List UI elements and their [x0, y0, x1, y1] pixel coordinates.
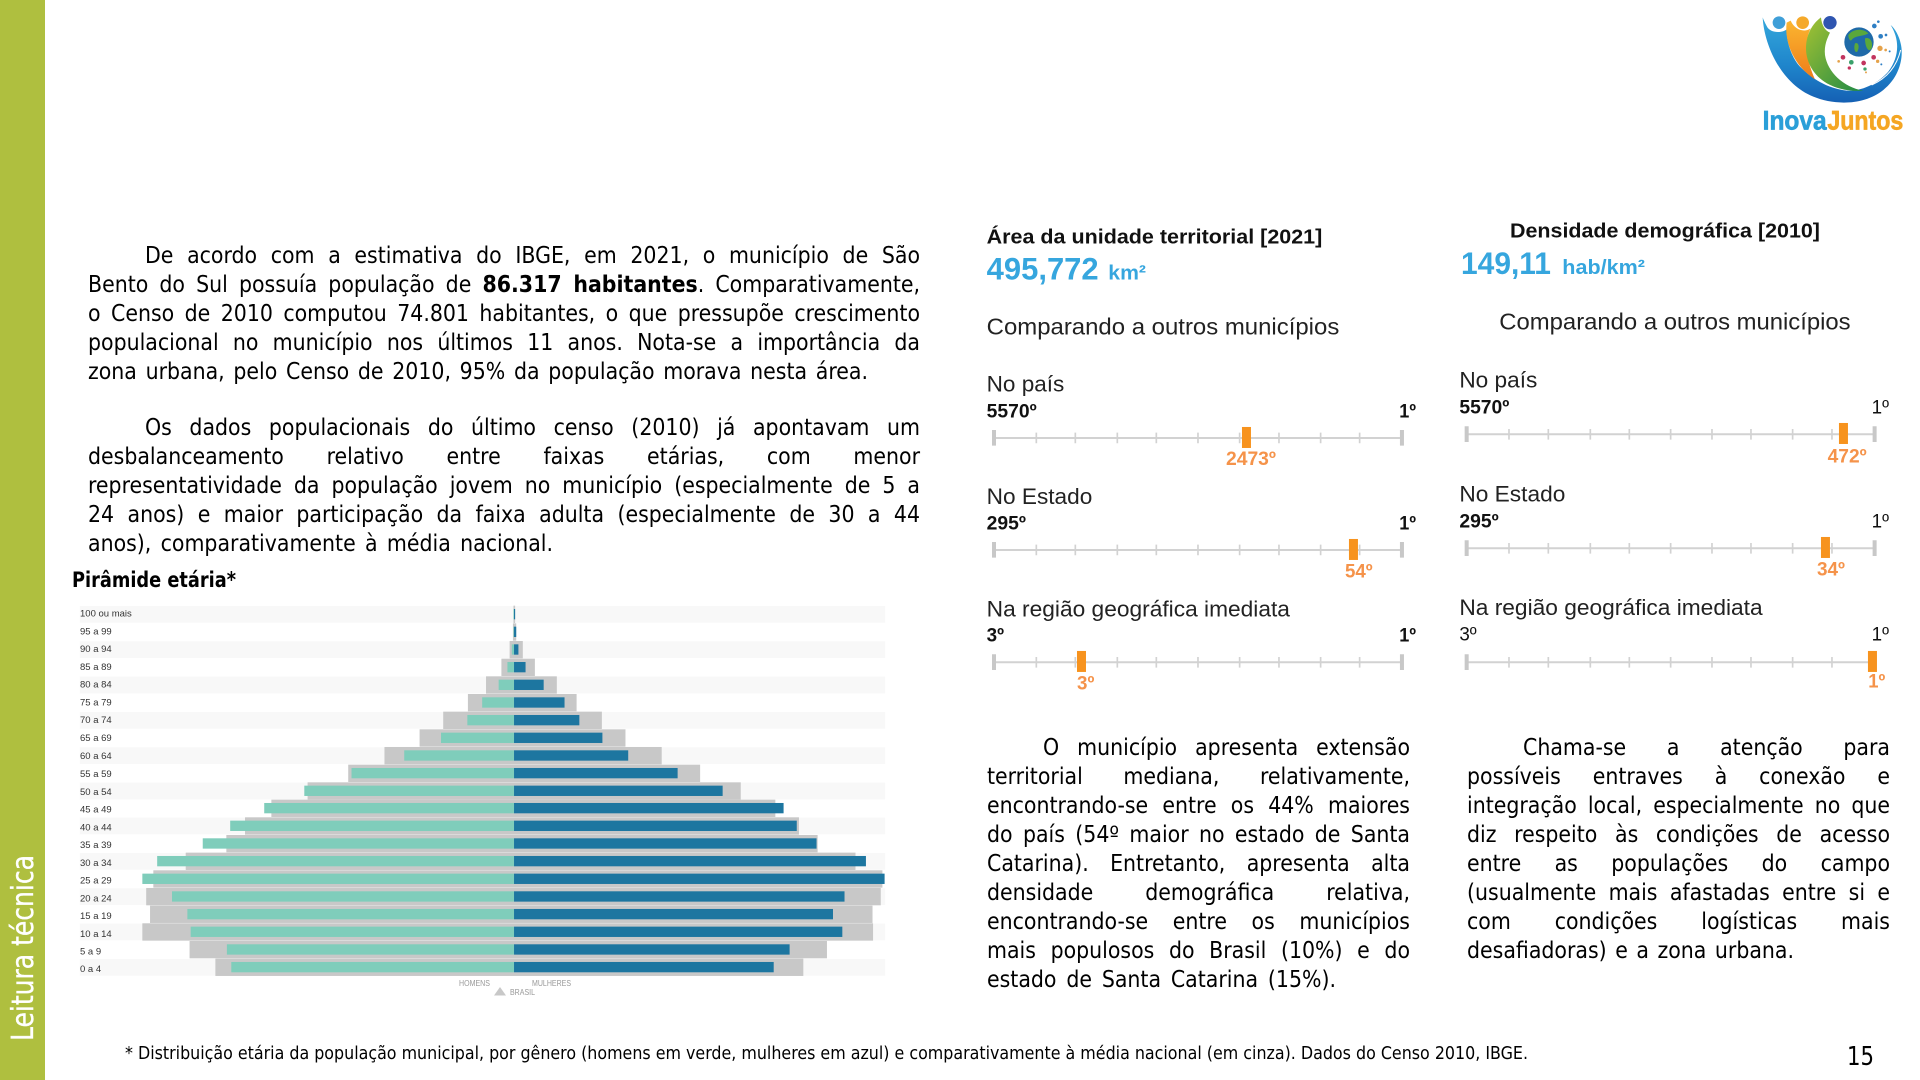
scale: no país: No país	[987, 372, 1064, 397]
text block: area commentary: estado de Santa Catarina (15%).	[987, 967, 1336, 993]
scale: no estado: 295º	[987, 513, 1026, 534]
text block: paragraph 2: 24 anos) e maior participação da faixa adulta (especialmente de 30 a 44	[88, 502, 920, 528]
text block: area commentary: O município apresenta extensão	[1043, 735, 1410, 761]
logo: InovaJuntos: Juntos	[1827, 105, 1903, 135]
heading: Pirâmide etária: Pirâmide etária*	[72, 568, 236, 592]
row bands	[80, 606, 885, 976]
density title and value	[1461, 220, 1851, 334]
legend: MULHERES	[532, 979, 571, 988]
scale: no estado: 34º	[1817, 560, 1845, 581]
area title and value: km²	[1108, 262, 1146, 284]
scale: no estado: 54º	[1345, 561, 1373, 582]
age labels: 25 a 29	[80, 876, 112, 886]
text block: paragraph 1: o Censo de 2010 computou 74.801 habitantes, o que pressupõe crescimento	[88, 300, 920, 326]
scale: no país	[987, 372, 1416, 470]
scale: região geográfica imediata: 3º	[987, 626, 1004, 647]
text block: paragraph 1	[88, 242, 920, 384]
text block: paragraph 2: representatividade da população jovem no município (especialmente de 5 a	[88, 473, 920, 499]
area title and value	[987, 225, 1339, 339]
text block: paragraph 2: desbalanceamento relativo entre faixas etárias, com menor	[88, 444, 920, 470]
text block: paragraph 1: populacional no município nos últimos 11 anos. Nota-se a importância da	[88, 330, 920, 356]
scale: no país: No país	[1459, 368, 1537, 393]
text block: density commentary	[1467, 735, 1890, 964]
age labels: 20 a 24	[80, 894, 112, 904]
age labels: 70 a 74	[80, 715, 112, 726]
age labels: 0 a 4	[80, 964, 101, 975]
page number: 15	[1847, 1042, 1874, 1072]
male bars	[142, 609, 514, 972]
text block: density commentary: entre as populações do campo	[1467, 851, 1890, 877]
age labels: 10 a 14	[80, 929, 112, 940]
age labels: 95 a 99	[80, 626, 112, 638]
sidebar: Leitura técnica	[0, 0, 45, 1080]
scale: região geográfica imediata: 1º	[1399, 626, 1416, 647]
area title and value: Comparando a outros municípios	[987, 313, 1339, 339]
text block: density commentary: diz respeito às condições de acesso	[1467, 822, 1890, 848]
age labels	[80, 608, 132, 975]
text block: density commentary: com condições logísticas mais	[1467, 909, 1890, 935]
text block: area commentary: Catarina). Entretanto, apresenta alta	[987, 851, 1410, 877]
text block: area commentary	[987, 735, 1410, 993]
scale: região geográfica imediata: Na região geográfica imediata	[987, 597, 1291, 622]
area title and value: 495,772	[987, 250, 1099, 286]
text block: density commentary: Chama-se a atenção para	[1523, 735, 1890, 761]
text block: density commentary: integração local, especialmente no que	[1467, 793, 1890, 819]
scale: no país: 1º	[1872, 397, 1889, 418]
text block: density commentary: desafiadoras) e a zona urbana.	[1467, 938, 1794, 964]
scale: região geográfica imediata	[1459, 595, 1889, 692]
text block: density commentary: possíveis entraves à conexão e	[1467, 764, 1890, 790]
text block: area commentary: territorial mediana, relativamente,	[987, 764, 1410, 790]
text block: area commentary: do país (54º maior no estado de Santa	[987, 822, 1410, 848]
text block: density commentary: (usualmente mais afastadas entre si e	[1467, 880, 1890, 906]
density title and value: hab/km²	[1562, 257, 1645, 279]
text block: paragraph 2: Os dados populacionais do último censo (2010) já apontavam um	[145, 415, 920, 441]
text block: paragraph 2: anos), comparativamente à média nacional.	[88, 531, 553, 557]
national comparison bars (Brasil)	[142, 606, 882, 976]
scale: no país: 5570º	[1459, 397, 1509, 418]
density title and value: Densidade demográfica [2010]	[1510, 220, 1820, 243]
sidebar label: Leitura técnica	[6, 855, 41, 1041]
density title and value: 149,11	[1461, 245, 1551, 281]
age labels: 60 a 64	[80, 751, 112, 762]
legend: HOMENS	[459, 979, 490, 988]
age labels: 5 a 9	[80, 946, 101, 958]
scale: no país: 5570º	[987, 401, 1037, 422]
scale: região geográfica imediata: 1º	[1872, 625, 1889, 646]
age labels: 45 a 49	[80, 804, 112, 816]
age labels: 80 a 84	[80, 680, 112, 690]
female bars	[514, 609, 885, 972]
area title and value: Área da unidade territorial [2021]	[987, 225, 1322, 248]
scale: no estado: 1º	[1399, 513, 1416, 534]
scale: no país	[1459, 368, 1889, 467]
scale: região geográfica imediata: 3º	[1459, 625, 1477, 646]
scale: região geográfica imediata	[987, 597, 1416, 694]
text block: area commentary: encontrando-se entre os 44% maiores	[987, 793, 1410, 819]
age labels: 65 a 69	[80, 733, 112, 744]
scale: no país: 2473º	[1226, 449, 1276, 470]
age labels: 40 a 44	[80, 822, 112, 834]
text block: paragraph 1: De acordo com a estimativa do IBGE, em 2021, o município de São	[145, 242, 920, 268]
footnote: * Distribuição etária da população municipal, por gênero (homens em verde, mulheres em azul) e comparativamente à média nacional (em cinza). Dados do Censo 2010, IBGE.	[125, 1043, 1528, 1064]
age labels: 90 a 94	[80, 644, 112, 655]
scale: região geográfica imediata: 1º	[1868, 671, 1885, 692]
logo: InovaJuntos: Inova	[1763, 105, 1827, 135]
age labels: 55 a 59	[80, 769, 112, 780]
legend: BRASIL	[510, 988, 535, 997]
scale: no estado: 1º	[1872, 511, 1889, 532]
age labels: 35 a 39	[80, 840, 112, 851]
age labels: 30 a 34	[80, 858, 112, 869]
scale: região geográfica imediata: Na região geográfica imediata	[1459, 595, 1763, 620]
scale: no estado: No Estado	[1459, 482, 1565, 507]
age labels: 15 a 19	[80, 911, 112, 922]
scale: no estado	[987, 484, 1416, 582]
age labels: 85 a 89	[80, 662, 112, 673]
age labels: 100 ou mais	[80, 608, 132, 620]
legend	[459, 979, 571, 997]
text block: area commentary: densidade demográfica relativa,	[987, 880, 1410, 906]
text block: area commentary: encontrando-se entre os municípios	[987, 909, 1410, 935]
scale: no país: 1º	[1399, 401, 1416, 422]
scale: no estado: 295º	[1459, 511, 1499, 532]
text block: area commentary: mais populosos do Brasil (10%) e do	[987, 938, 1410, 964]
scale: no país: 472º	[1828, 446, 1867, 467]
scale: no estado	[1459, 482, 1889, 581]
age labels: 50 a 54	[80, 787, 112, 798]
text block: paragraph 1: zona urbana, pelo Censo de 2010, 95% da população morava nesta área.	[88, 358, 868, 384]
scale: no estado: No Estado	[987, 484, 1092, 509]
text block: paragraph 2	[88, 415, 920, 557]
density title and value: Comparando a outros municípios	[1499, 308, 1851, 334]
age labels: 75 a 79	[80, 698, 112, 708]
text block: paragraph 1: Bento do Sul possuía população de 86.317 habitantes. Comparativamente,	[88, 272, 920, 298]
scale: região geográfica imediata: 3º	[1077, 673, 1094, 694]
